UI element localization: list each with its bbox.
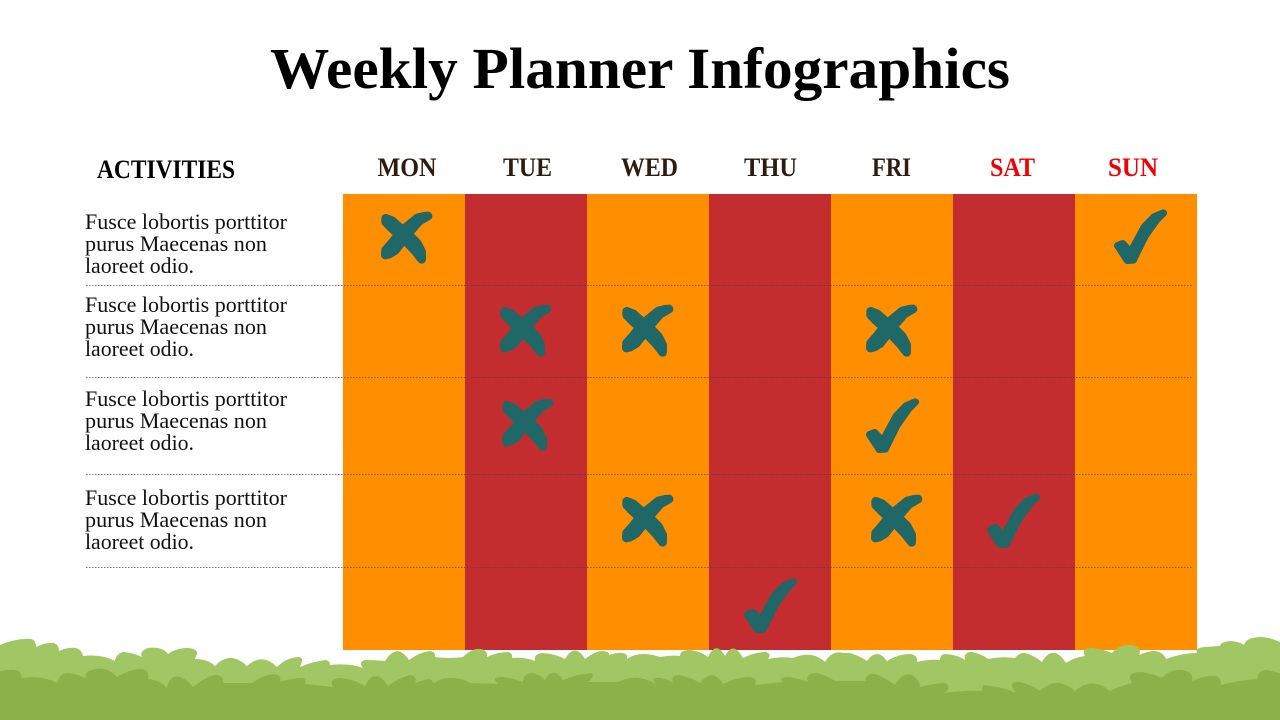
heading: activities: ACTIVITIES <box>97 155 235 184</box>
front grass layer <box>0 669 1280 720</box>
header: tuesday: TUE <box>503 153 552 182</box>
activity text: row 4: laoreet odio. <box>85 529 194 554</box>
header: monday: MON <box>378 153 437 182</box>
activity text: row 2 <box>85 292 288 361</box>
activity text: row 2: purus Maecenas non <box>85 314 267 339</box>
activity text: row 2: Fusce lobortis porttitor <box>85 292 288 317</box>
activity text: row 2: laoreet odio. <box>85 336 194 361</box>
icon: check, row 3 friday <box>870 402 915 449</box>
activity text: row 4 <box>85 485 288 554</box>
icon: check, row 4 saturday <box>991 497 1036 544</box>
grass footer <box>0 637 1280 720</box>
back grass layer <box>0 637 1280 720</box>
header: sunday: SUN <box>1108 153 1158 182</box>
planner columns <box>343 194 1197 650</box>
day headers <box>378 153 1158 182</box>
activity text: row 3: laoreet odio. <box>85 430 194 455</box>
header: wednesday: WED <box>621 153 678 182</box>
icon: cross, row 2 tuesday <box>504 309 547 352</box>
header: friday: FRI <box>872 153 911 182</box>
icon: check, row 5 thursday <box>748 582 793 629</box>
icon: cross, row 2 wednesday <box>626 309 669 352</box>
activity text: row 1: purus Maecenas non <box>85 231 267 256</box>
icon: cross, row 2 friday <box>870 309 913 352</box>
activity text: row 1: laoreet odio. <box>85 253 194 278</box>
header: saturday: SAT <box>990 153 1035 182</box>
header: thursday: THU <box>744 153 797 182</box>
activity text: row 4: purus Maecenas non <box>85 507 267 532</box>
activity text: row 1 <box>85 209 288 278</box>
icon: cross, row 1 monday <box>385 216 428 259</box>
icon: check, row 1 sunday <box>1118 213 1163 260</box>
title: Weekly Planner Infographics <box>270 36 1010 101</box>
activity text: row 3: Fusce lobortis porttitor <box>85 386 288 411</box>
icon: cross, row 3 tuesday <box>506 403 549 446</box>
activity text: row 4: Fusce lobortis porttitor <box>85 485 288 510</box>
activity text: row 3 <box>85 386 288 455</box>
activity text: row 3: purus Maecenas non <box>85 408 267 433</box>
icon: cross, row 4 friday <box>875 499 918 542</box>
icon: cross, row 4 wednesday <box>626 499 669 542</box>
activity text: row 1: Fusce lobortis porttitor <box>85 209 288 234</box>
